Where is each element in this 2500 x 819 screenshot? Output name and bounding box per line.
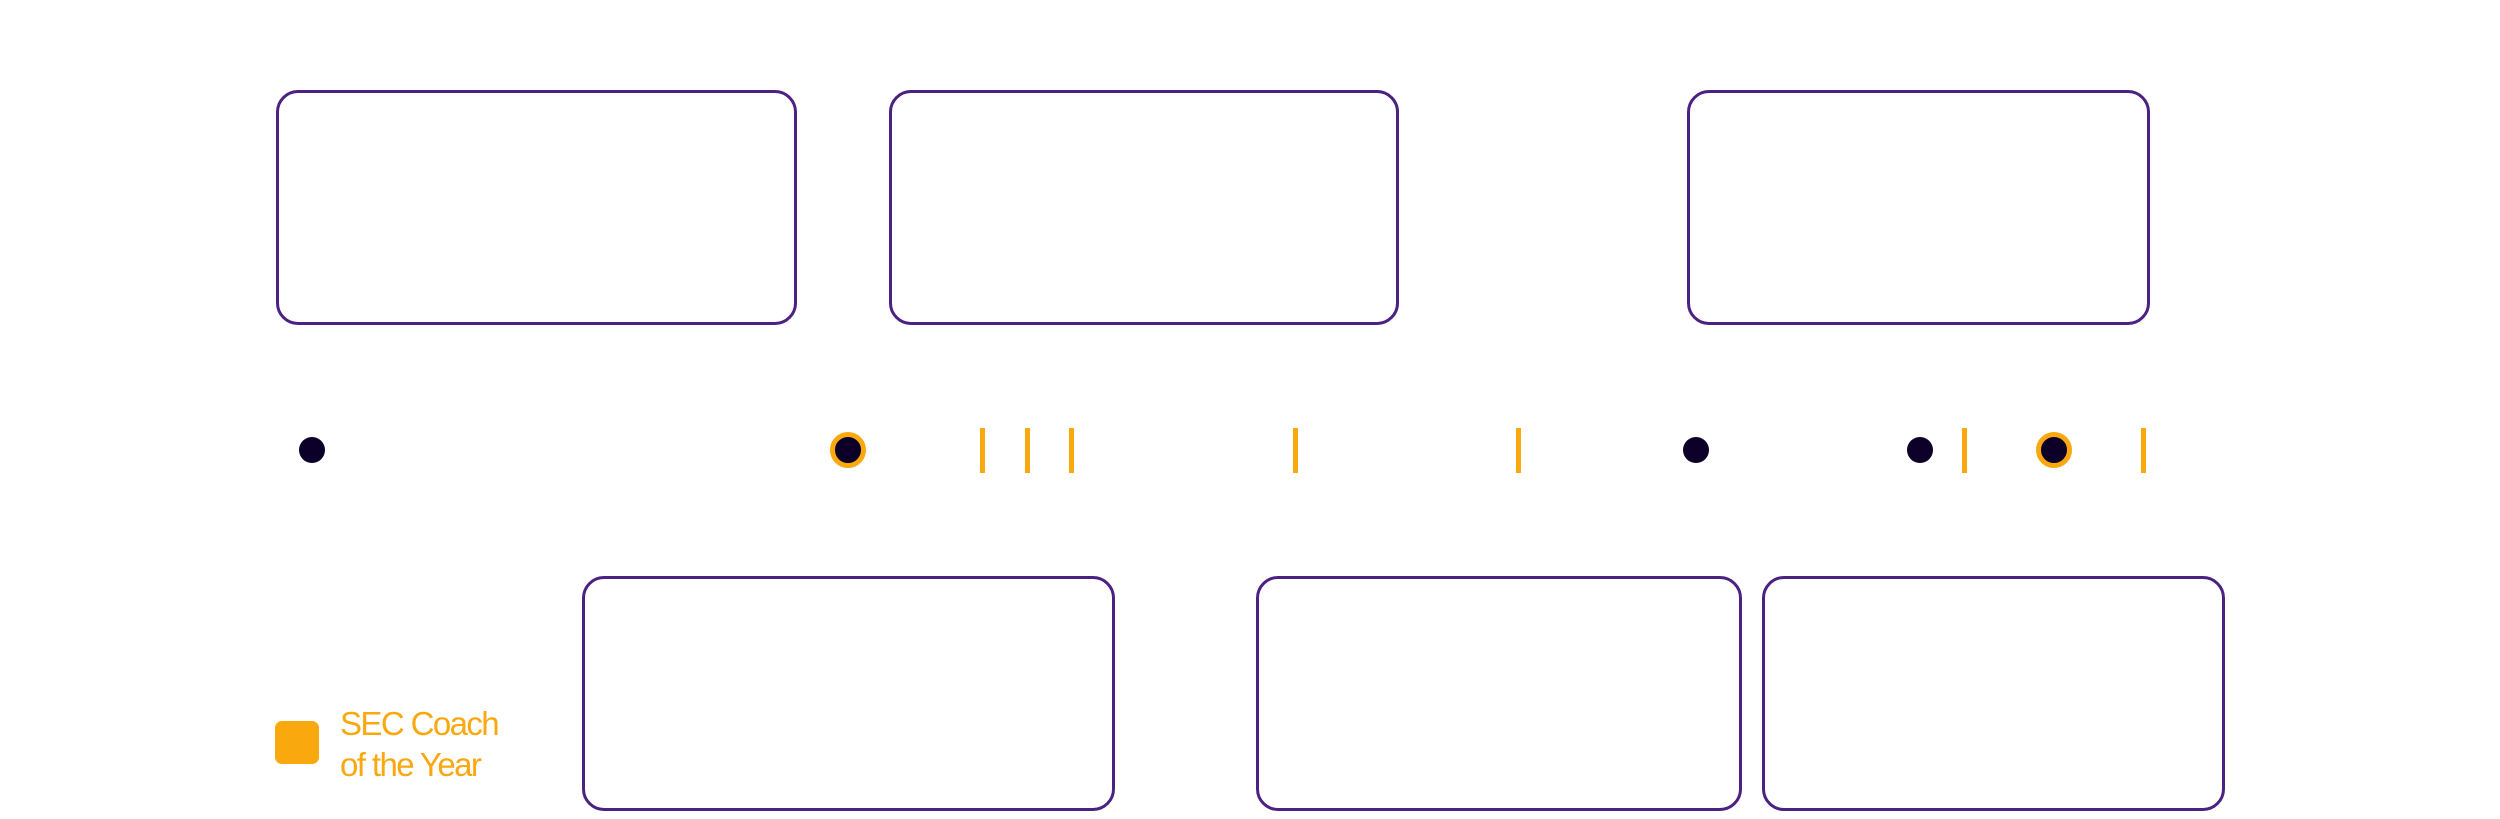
- tick 7: [2141, 428, 2146, 473]
- panel: top box 2: [889, 90, 1399, 325]
- tick 3: [1069, 428, 1074, 473]
- tick 1: [980, 428, 985, 473]
- panel: top box 3: [1687, 90, 2150, 325]
- marker: dot 3: [1907, 437, 1933, 463]
- marker: dot 1: [299, 437, 325, 463]
- tick 5: [1516, 428, 1521, 473]
- panel: bottom box 2: [1256, 576, 1742, 811]
- legend swatch: [275, 721, 319, 764]
- marker: coach of year ring 1: [830, 432, 866, 468]
- legend label: [340, 705, 498, 783]
- tick 4: [1293, 428, 1298, 473]
- panel: bottom box 1: [582, 576, 1115, 811]
- legend label: of the Year: [340, 746, 480, 783]
- panel: top box 1: [276, 90, 797, 325]
- tick 6: [1962, 428, 1967, 473]
- legend: [275, 705, 498, 783]
- tick 2: [1025, 428, 1030, 473]
- legend label: SEC Coach: [340, 705, 498, 742]
- timeline markers: [299, 428, 2146, 473]
- marker: coach of year ring 2: [2036, 432, 2072, 468]
- panel: bottom box 3: [1762, 576, 2225, 811]
- marker: dot 2: [1683, 437, 1709, 463]
